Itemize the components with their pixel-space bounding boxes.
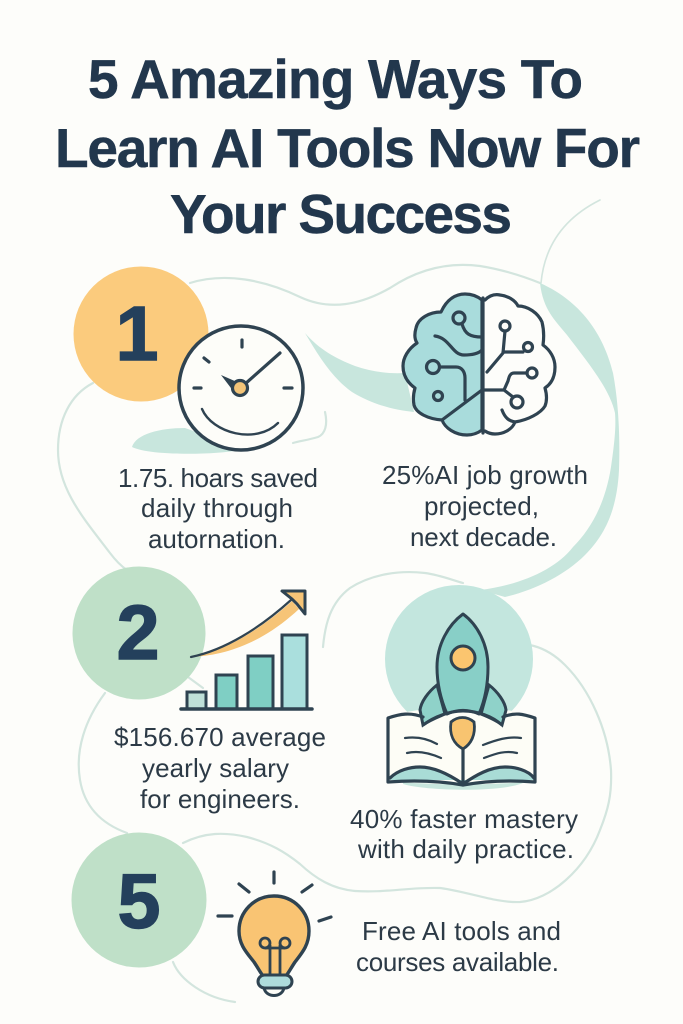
number badge 2 <box>72 566 206 700</box>
text: job growth <box>382 460 588 552</box>
text: job growth: 25%AI job growth <box>382 460 588 490</box>
text: faster mastery: with daily practice. <box>357 834 574 864</box>
panel: faster mastery <box>350 585 578 864</box>
panel: AI job growth <box>382 294 588 552</box>
text: faster mastery: 40% faster mastery <box>350 804 578 834</box>
title <box>55 48 640 245</box>
text: average salary: $156.670 average <box>114 722 326 752</box>
text: hours saved <box>118 463 318 554</box>
text: average salary <box>114 722 326 814</box>
text: free tools: Free AI tools and <box>362 916 561 946</box>
text: faster mastery <box>350 804 578 864</box>
text: free tools <box>356 916 561 977</box>
panel: step 1 time saved <box>74 266 318 554</box>
icon: rocket and open book <box>385 585 535 790</box>
text: average salary: yearly salary <box>142 753 289 783</box>
text: job growth: projected, <box>424 491 539 521</box>
text: job growth: next decade. <box>410 522 557 552</box>
icon: brain <box>403 294 555 435</box>
text: average salary: for engineers. <box>140 784 300 814</box>
title: 5 Amazing Ways To <box>88 48 583 110</box>
title: Your Success <box>170 183 512 245</box>
panel: step 2 salary <box>72 566 326 814</box>
number badge 1 <box>74 266 208 402</box>
number badge 1: 1 <box>116 291 158 377</box>
number badge 5 <box>72 832 206 968</box>
background flowing curves and swooshes <box>58 200 619 1002</box>
icon: clock <box>179 326 303 450</box>
icon: light bulb <box>218 872 331 996</box>
title: Learn AI Tools Now For <box>55 117 640 179</box>
text: free tools: courses available. <box>356 947 559 977</box>
icon: rising bar chart <box>181 591 312 709</box>
text: hours saved: autornation. <box>148 524 285 554</box>
number badge 2: 2 <box>117 590 159 676</box>
text: hours saved: 1.75. hoars saved <box>118 463 318 493</box>
panel: step 5 free tools <box>72 832 561 996</box>
number badge 5: 5 <box>118 859 160 945</box>
text: hours saved: daily through <box>141 493 293 523</box>
